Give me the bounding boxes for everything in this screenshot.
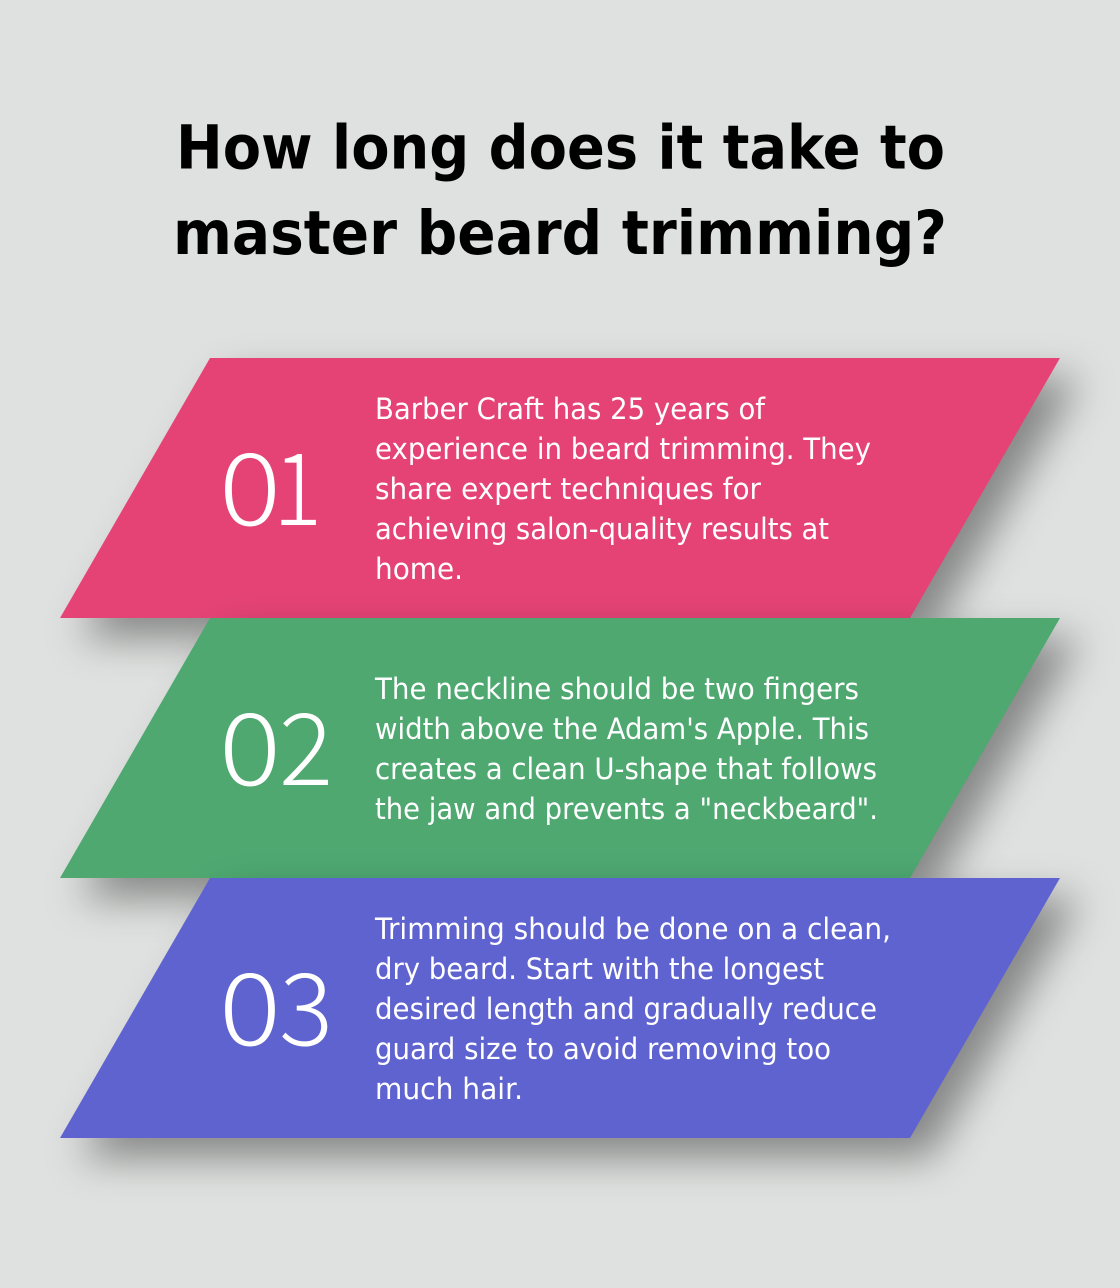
step 03 text	[374, 912, 891, 1106]
step 03 text: dry beard. Start with the longest	[375, 952, 824, 986]
step 02 text: width above the Adam's Apple. This	[375, 712, 869, 746]
step 03 text: Trimming should be done on a clean,	[374, 912, 891, 946]
step 03 number: 3	[279, 929, 333, 1074]
panel: step 03	[60, 878, 1080, 1158]
step 01 text: achieving salon-quality results at	[375, 512, 829, 546]
title	[173, 112, 947, 269]
step 02 text	[374, 672, 878, 826]
step 01 shape	[60, 358, 1060, 618]
step 02 text: The neckline should be two fingers	[374, 672, 859, 706]
step 02 number: 2	[279, 669, 333, 814]
step 01 text: Barber Craft has 25 years of	[375, 392, 766, 426]
step 01 text: share expert techniques for	[375, 472, 761, 506]
step 01 text: home.	[375, 552, 463, 586]
step 01 number	[219, 409, 322, 554]
step 02 number: 0	[219, 669, 281, 814]
step 01 number: 1	[273, 409, 322, 554]
step 03 text: desired length and gradually reduce	[375, 992, 877, 1026]
step 02 text: creates a clean U-shape that follows	[375, 752, 877, 786]
step 01 number: 0	[219, 409, 281, 554]
title: How long does it take to	[176, 112, 945, 184]
step 03 text: much hair.	[375, 1072, 523, 1106]
step 01 text	[375, 392, 871, 586]
step 02 shape	[60, 618, 1060, 878]
step 02 number	[219, 669, 333, 814]
step 02 text: the jaw and prevents a "neckbeard".	[375, 792, 878, 826]
step 03 text: guard size to avoid removing too	[375, 1032, 831, 1066]
panel: step 02	[60, 618, 1080, 898]
step 03 shape	[60, 878, 1060, 1138]
step 01 text: experience in beard trimming. They	[375, 432, 871, 466]
title: master beard trimming?	[173, 198, 947, 269]
panel: step 01	[60, 358, 1080, 638]
step 03 number	[219, 929, 333, 1074]
step 03 number: 0	[219, 929, 281, 1074]
